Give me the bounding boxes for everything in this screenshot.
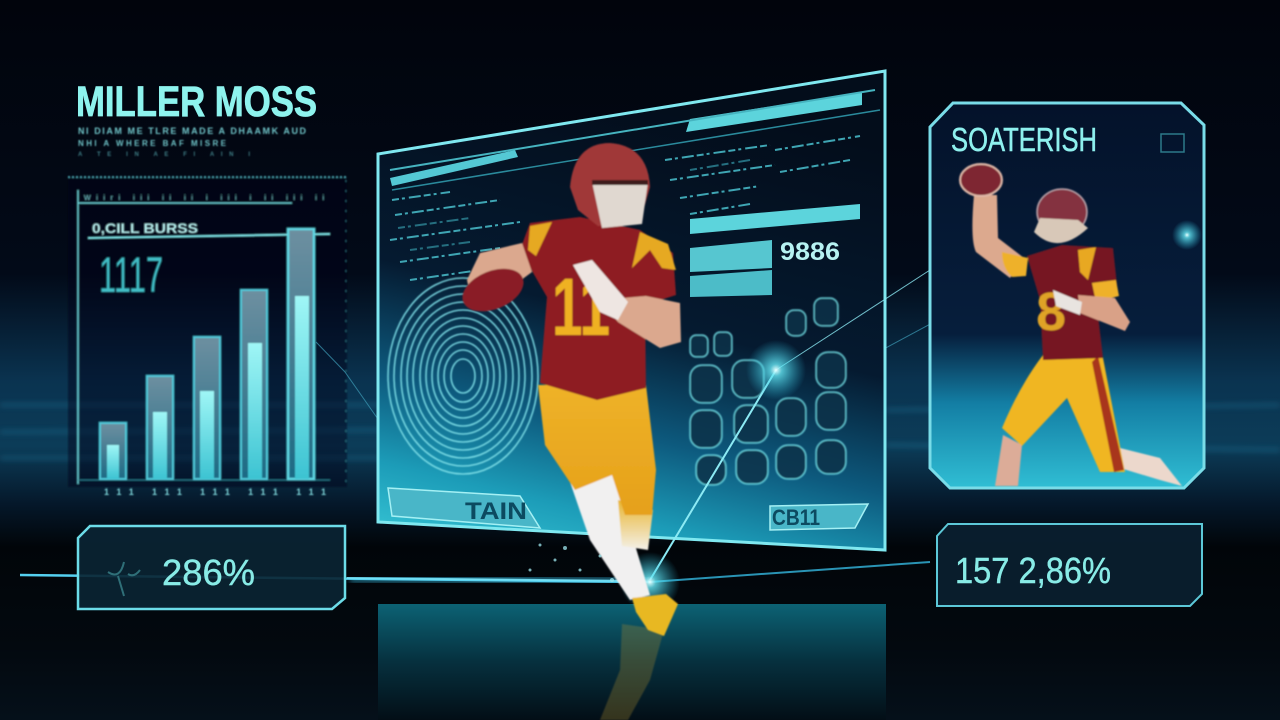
icon: box squiggle [108, 562, 140, 596]
footer label right: CB11 [772, 505, 820, 530]
chart label: 0,CILL BURSS [92, 220, 198, 236]
card icon [1161, 134, 1184, 152]
football [456, 260, 530, 320]
visor [592, 180, 648, 185]
axis labels: 111 111 111 111 111 [104, 487, 326, 497]
bar 3 [194, 337, 220, 479]
throwing arm [467, 243, 532, 295]
background light streaks [0, 405, 1280, 458]
jersey number: 11 [552, 262, 610, 353]
subtitle text: NHI A WHERE BAF MISRE [78, 139, 227, 148]
screen top stripes [390, 150, 518, 186]
cleat [632, 594, 678, 636]
player: running quarterback [456, 143, 681, 720]
right value: 157 2,86% [955, 550, 1111, 591]
panel: second player card [930, 103, 1204, 488]
footer label left: TAIN [465, 498, 527, 525]
subtitle text [78, 126, 306, 158]
fingerprint rings [388, 278, 538, 474]
sleeve right [1092, 280, 1119, 302]
shoulder stripe [1078, 247, 1096, 280]
screen footer shapes [388, 488, 868, 530]
hand and wrist wrap [573, 260, 628, 320]
facemask [1034, 218, 1088, 243]
sleeve left [1002, 252, 1028, 277]
trailing leg [570, 470, 650, 600]
lower legs [995, 435, 1022, 486]
wrist wrap [1053, 290, 1082, 315]
jersey shoulder left [528, 222, 552, 256]
pants [1002, 355, 1125, 472]
player: throwing quarterback [960, 164, 1182, 486]
map data dashes [390, 136, 860, 280]
facemask [592, 182, 648, 228]
lead sock [618, 500, 653, 550]
icon: card sparkle [1172, 220, 1202, 250]
stat box: left [78, 526, 345, 609]
forearm [1078, 295, 1130, 331]
bar 2 [147, 376, 173, 479]
beam right of stat box [347, 578, 640, 581]
icon grid [690, 298, 846, 485]
sparkles [528, 544, 614, 582]
jersey [520, 217, 676, 400]
subtitle text: NI DIAM ME TLRE MADE A DHAAMK AUD [78, 126, 306, 136]
helmet [570, 143, 650, 226]
bar 1 [100, 423, 126, 479]
bar 4 [241, 290, 267, 479]
connector lines [316, 300, 975, 422]
bar 5 [288, 229, 314, 479]
helmet [1037, 189, 1087, 235]
panel: stats chart [68, 177, 347, 497]
subtitle text: A TE IN AE FI AIN I [78, 152, 250, 158]
panel: main holographic screen [378, 71, 885, 550]
chart header text: Wiiri iii ii ii i iii i ii iii ii [84, 195, 324, 202]
football [960, 164, 1002, 196]
floor reflection [378, 604, 886, 720]
light beams behind players [20, 270, 930, 612]
stat value: 9886 [780, 238, 840, 266]
stat bars [690, 204, 860, 234]
throwing arm [972, 195, 1024, 278]
stat box: right [937, 524, 1202, 606]
forearm [600, 296, 681, 348]
jersey shoulder right [632, 232, 676, 270]
jersey [1027, 245, 1117, 360]
card heading: SOATERISH [951, 121, 1097, 158]
small value label: 1117 [99, 247, 163, 303]
left value: 286% [162, 552, 255, 593]
title: MILLER MOSS [76, 78, 317, 126]
pants [538, 385, 656, 515]
jersey number: 8 [1036, 282, 1066, 342]
reflection [600, 624, 664, 720]
